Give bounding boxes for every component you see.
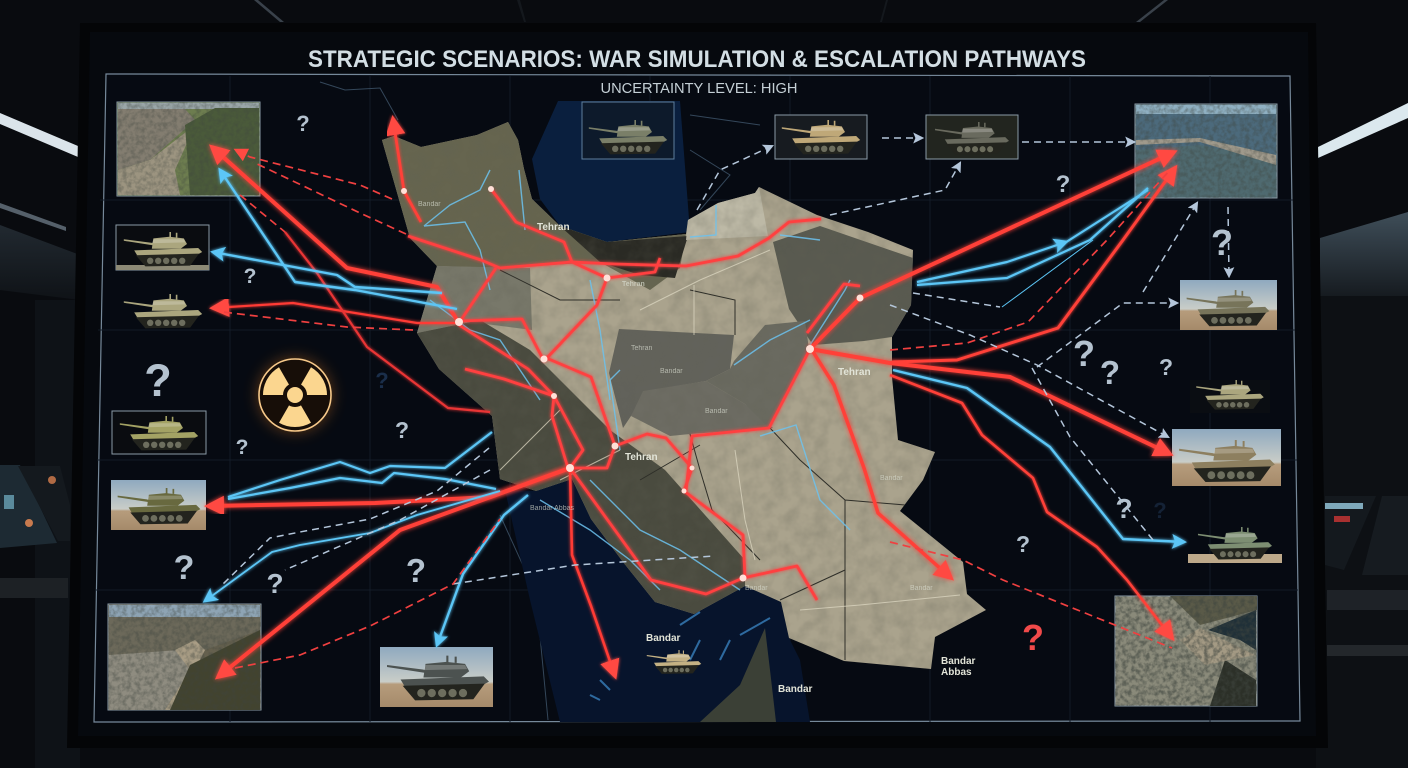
map labels: Bandar: [910, 585, 933, 592]
question marks: ?: [1159, 354, 1173, 380]
red arrow: to southwest tank: [208, 468, 570, 506]
tank: right 3: [1172, 429, 1281, 486]
question marks: ?: [375, 368, 389, 393]
dashed red route: to southeast terrain: [890, 542, 1172, 648]
blue routes: west: [228, 432, 496, 499]
question marks: ?: [296, 111, 310, 136]
console: left control desk: [0, 465, 70, 598]
map labels: Tehran: [838, 367, 871, 378]
red arrow: to southeast terrain: [890, 375, 1172, 638]
region: Caspian shore dark band: [560, 226, 688, 278]
blue arrow: to lower left: [205, 491, 500, 601]
dashed red route: to northwest terrain upper: [236, 150, 392, 199]
blue arrow: small branch: [917, 242, 1066, 282]
red arrow: second northeast route: [892, 168, 1175, 362]
map labels: Tehran: [625, 452, 658, 463]
blue arrow: to southeast tank: [893, 370, 1184, 542]
dashed arrow: to east tank: [890, 305, 1168, 437]
map labels: Bandar: [646, 633, 681, 644]
map: Iran regions: [370, 115, 995, 680]
tank: left 2: [124, 294, 202, 328]
question marks: ?: [1153, 498, 1167, 523]
tank: gulf silhouette: [647, 650, 701, 674]
region: north coast pale: [686, 187, 768, 240]
question marks: ?: [144, 355, 172, 406]
tank: left 4: [111, 480, 206, 530]
region: east centre: [706, 321, 809, 428]
dashed red route: southwest: [235, 519, 500, 668]
map labels: Bandar: [880, 475, 903, 482]
map labels: Bandar: [705, 408, 728, 415]
dashed arrow: up to northeast terrain: [1143, 203, 1197, 292]
blue arrow: to gulf tank: [437, 495, 528, 645]
sea: Gulf: [505, 479, 810, 722]
red arrow: to northwest terrain: [212, 147, 457, 320]
question marks: ?: [1211, 222, 1233, 263]
dashed line: east short: [913, 293, 1000, 307]
question marks: ?: [1056, 171, 1070, 198]
dashed red route: to west tank: [223, 312, 413, 330]
title: STRATEGIC SCENARIOS: WAR SIMULATION & ESCALATION PATHWAYS: [308, 46, 1086, 73]
map: thin blue routes: [424, 170, 850, 590]
dashed route: west: [222, 448, 489, 585]
dashed red route: northwest diagonal: [240, 195, 285, 232]
red glow nodes: [401, 186, 864, 582]
blue arrow: to upper west tank: [213, 252, 442, 293]
question marks: ?: [244, 265, 256, 288]
blue thin route: east: [1002, 240, 1093, 307]
region: southwest terrain: [417, 320, 745, 614]
map labels: Bandar: [418, 201, 441, 208]
red arrow: to the gulf: [570, 468, 615, 676]
tank: right 4: [1188, 527, 1282, 563]
terrain grain: [492, 188, 978, 668]
map labels: Tehran: [622, 281, 645, 288]
land: peninsula south: [700, 628, 776, 722]
map labels: Tehran: [537, 222, 570, 233]
gulf islands: [590, 612, 770, 700]
subtitle: uncertainty level: UNCERTAINTY LEVEL: HIGH: [600, 80, 798, 97]
tank: right 1: [1180, 280, 1277, 330]
map labels: Bandar: [778, 684, 813, 695]
tank: top 2: [775, 115, 867, 159]
blue routes: west to northwest: [213, 170, 457, 309]
question marks: ?: [266, 568, 284, 599]
question marks: ?: [1100, 354, 1120, 391]
question marks: [144, 111, 1233, 658]
region: east: [773, 226, 913, 345]
question marks: ?: [174, 549, 194, 587]
icon: radiation hazard: [257, 357, 333, 433]
question marks: ?: [406, 552, 426, 589]
tank: top 3: [926, 115, 1018, 159]
dashed line: east to southeast: [1032, 368, 1153, 540]
terrain photo: southeast: [1115, 596, 1257, 706]
tank: left 3: [112, 411, 206, 454]
terrain photo: northwest: [117, 102, 260, 196]
land base: [382, 122, 986, 669]
tank: bottom: [380, 647, 493, 707]
sea: Caspian: [532, 101, 690, 242]
blue routes: northeast: [917, 188, 1148, 285]
map labels: Bandar: [745, 585, 768, 592]
dashed red route: to northeast terrain: [890, 170, 1170, 350]
tank: left 1: [116, 225, 209, 270]
red arrow: to north: [393, 119, 421, 222]
region: west midtone: [417, 266, 532, 333]
dashed arrow: terrain to right tank: [1228, 207, 1229, 276]
dashed arrow: to top tank 2: [697, 146, 772, 210]
red arrow: southeast inside the map: [810, 347, 951, 578]
blue arrow: to northwest terrain: [220, 170, 457, 309]
question marks: ?: [1115, 493, 1133, 524]
dashed route: lower west: [285, 470, 490, 570]
dashed arrow: from map to top tank 3: [830, 163, 960, 215]
terrain photo: southwest: [108, 604, 261, 710]
map labels: Bandar: [941, 656, 976, 667]
red escalation routes across the map: [408, 189, 860, 600]
map labels: Bandar Abbas: [530, 505, 574, 512]
console: right control desk: [1325, 496, 1408, 656]
region borders: [500, 270, 905, 660]
question marks: ?: [236, 436, 248, 459]
region: centre block: [609, 329, 734, 428]
dashed arrow: top tank 2 to 3: [882, 137, 922, 139]
tank: top 1: [582, 102, 674, 159]
region: northwest terrain: [382, 122, 686, 290]
dashed red routes: [223, 150, 1172, 668]
terrain photo: northeast: [1135, 104, 1277, 198]
map: pale road lines: [500, 250, 960, 610]
tank: right 2: [1190, 380, 1270, 413]
dashed route: across the south: [453, 556, 714, 584]
map labels: Abbas: [941, 667, 972, 678]
red line: west diagonal route: [285, 232, 490, 412]
dashed pathways: [222, 138, 1229, 585]
map labels: Tehran: [631, 345, 653, 352]
dashed arrow: to right tank: [1037, 303, 1177, 367]
question marks: ?: [395, 417, 409, 443]
red arrow: to west tank: [213, 303, 460, 323]
map labels: [418, 201, 976, 695]
map labels: Bandar: [660, 368, 683, 375]
question marks: ?: [1073, 333, 1095, 374]
question marks: ?: [1022, 617, 1044, 658]
dashed arrow: top tank 3 to terrain: [1022, 141, 1134, 143]
region: lower centre: [631, 381, 773, 436]
question marks: ?: [1016, 531, 1030, 557]
red arrow: to northeast terrain: [810, 152, 1174, 349]
dashed red route: to northwest terrain lower: [253, 162, 406, 234]
red arrow: to southwest terrain: [218, 468, 570, 677]
red arrow: to east tank: [810, 349, 1170, 454]
faint map outlines beyond the land: [320, 82, 760, 720]
